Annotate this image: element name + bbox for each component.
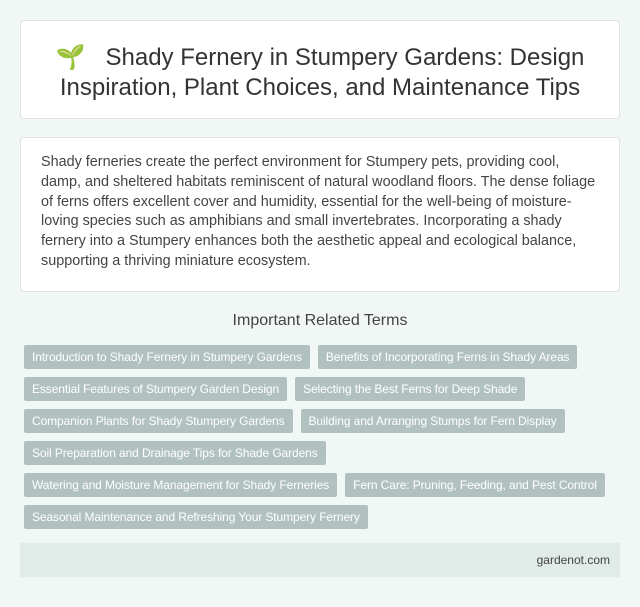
title card — [20, 20, 620, 119]
tags: Seasonal Maintenance and Refreshing Your Stumpery Fernery — [32, 510, 360, 524]
intro paragraph — [41, 154, 595, 269]
tags: Introduction to Shady Fernery in Stumpery Gardens — [32, 350, 302, 364]
section heading: Important Related Terms — [233, 312, 407, 329]
footer source text: gardenot.com — [537, 553, 610, 567]
tags: Benefits of Incorporating Ferns in Shady Areas — [326, 350, 569, 364]
intro paragraph: loving species such as amphibians and small invertebrates. Incorporating a shady — [41, 213, 562, 229]
intro paragraph: damp, and sheltered habitats reminiscent of natural woodland floors. The dense foliage — [41, 174, 595, 190]
footer — [20, 543, 620, 577]
intro paragraph: supporting a thriving miniature ecosystem. — [41, 253, 311, 269]
intro paragraph: of ferns offers excellent cover and humidity, essential for the well-being of moisture- — [41, 194, 572, 210]
tags: Watering and Moisture Management for Shady Ferneries — [32, 478, 329, 492]
tags: Selecting the Best Ferns for Deep Shade — [303, 382, 517, 396]
tags: Soil Preparation and Drainage Tips for Shade Gardens — [32, 446, 318, 460]
tags — [24, 345, 605, 529]
title: 🌱 Shady Fernery in Stumpery Gardens: Design Inspiration, Plant Choices, and Maintenance Tips — [56, 44, 584, 101]
tags: Essential Features of Stumpery Garden Design — [32, 382, 279, 396]
tags: Fern Care: Pruning, Feeding, and Pest Control — [353, 478, 597, 492]
tags: Building and Arranging Stumps for Fern Display — [308, 414, 557, 428]
intro paragraph: fernery into a Stumpery enhances both the aesthetic appeal and ecological balance, — [41, 233, 576, 249]
intro text card — [20, 137, 620, 292]
intro paragraph: Shady ferneries create the perfect environment for Stumpery pets, providing cool, — [41, 154, 559, 170]
tags: Companion Plants for Shady Stumpery Gardens — [32, 414, 284, 428]
